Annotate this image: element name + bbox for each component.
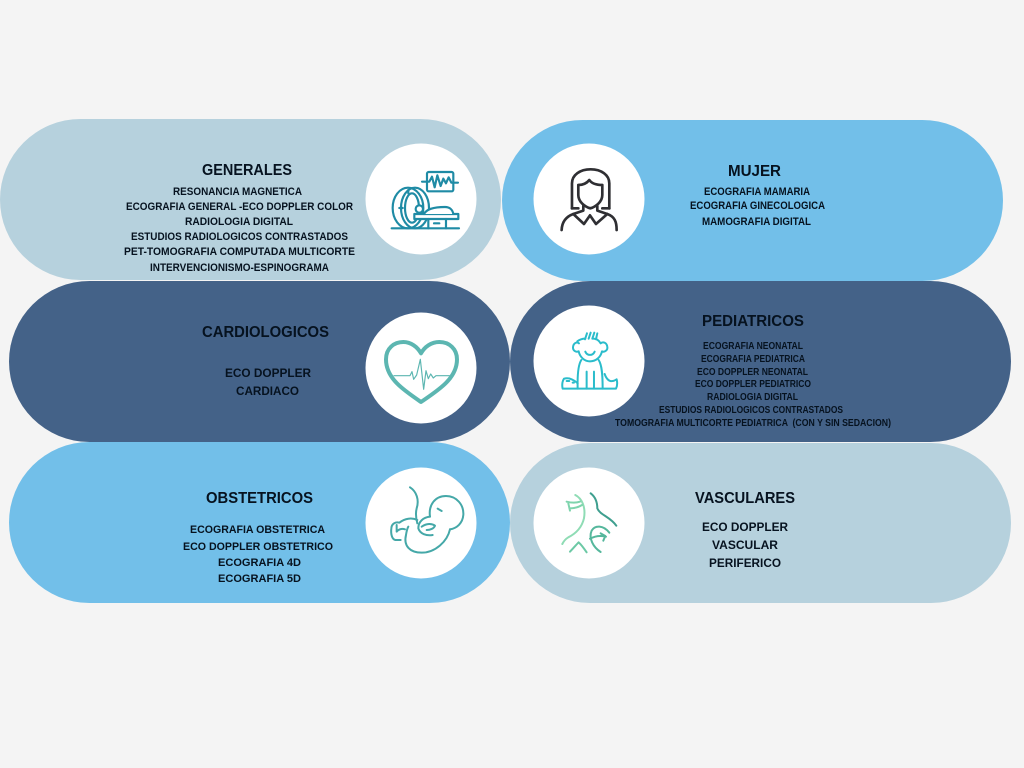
icon: heart with pulse [366, 312, 476, 424]
text block: mujer services: MAMOGRAFIA DIGITAL [702, 216, 811, 228]
text block: vasculares services: PERIFERICO [709, 556, 781, 570]
heading: generales: GENERALES [202, 162, 292, 179]
text block: cardiologicos services: CARDIACO [236, 384, 299, 398]
text block: pediatricos services: TOMOGRAFIA MULTICORTE PEDIATRICA (CON Y SIN SEDACION) [615, 418, 891, 429]
text block: generales services: RADIOLOGIA DIGITAL [185, 216, 293, 228]
icon: woman [534, 144, 644, 254]
text block: obstetricos services: ECO DOPPLER OBSTETRICO [183, 541, 333, 553]
text block: vasculares services [702, 520, 788, 570]
text block: pediatricos services: ECO DOPPLER PEDIATRICO [695, 379, 811, 390]
text block: obstetricos services: ECOGRAFIA 4D [218, 557, 301, 569]
heading: obstetricos: OBSTETRICOS [206, 490, 313, 507]
text block: mujer services: ECOGRAFIA MAMARIA [704, 186, 810, 198]
panel: cardiologicos [9, 281, 510, 442]
text block: pediatricos services: ESTUDIOS RADIOLOGICOS CONTRASTADOS [659, 405, 843, 416]
text block: generales services: PET-TOMOGRAFIA COMPUTADA MULTICORTE [124, 246, 355, 258]
panel: generales [0, 119, 501, 280]
text block: pediatricos services: ECO DOPPLER NEONATAL [697, 367, 808, 378]
text block: vasculares services: VASCULAR [712, 538, 778, 552]
text block: pediatricos services: ECOGRAFIA PEDIATRICA [701, 354, 805, 365]
icon: blood vessels [534, 468, 644, 578]
text block: obstetricos services [183, 524, 333, 585]
heading: cardiologicos: CARDIOLOGICOS [202, 324, 329, 341]
text block: vasculares services: ECO DOPPLER [702, 520, 788, 534]
icon: baby [534, 306, 644, 416]
text block: generales services: ECOGRAFIA GENERAL -ECO DOPPLER COLOR [126, 201, 353, 213]
heading: mujer: MUJER [728, 163, 781, 180]
text block: generales services: INTERVENCIONISMO-ESPINOGRAMA [150, 262, 329, 274]
panel: mujer [502, 120, 1003, 281]
panel: vasculares [510, 443, 1011, 603]
text block: pediatricos services: ECOGRAFIA NEONATAL [703, 341, 803, 352]
heading: pediatricos: PEDIATRICOS [702, 313, 804, 330]
text block: mujer services [690, 186, 825, 228]
text block: mujer services: ECOGRAFIA GINECOLOGICA [690, 200, 825, 212]
text block: obstetricos services: ECOGRAFIA OBSTETRICA [190, 524, 325, 536]
panel: pediatricos [510, 281, 1011, 442]
text block: obstetricos services: ECOGRAFIA 5D [218, 573, 301, 585]
text block: generales services: ESTUDIOS RADIOLOGICOS CONTRASTADOS [131, 231, 348, 243]
panel: obstetricos [9, 442, 510, 603]
heading: vasculares: VASCULARES [695, 490, 795, 507]
text block: generales services [124, 186, 355, 274]
text block: pediatricos services [615, 341, 891, 429]
text block: cardiologicos services: ECO DOPPLER [225, 366, 311, 380]
icon: MRI scanner [366, 144, 476, 254]
text block: generales services: RESONANCIA MAGNETICA [173, 186, 302, 198]
text block: pediatricos services: RADIOLOGIA DIGITAL [707, 392, 798, 403]
icon: fetus [366, 468, 476, 578]
text block: cardiologicos services [225, 366, 311, 398]
